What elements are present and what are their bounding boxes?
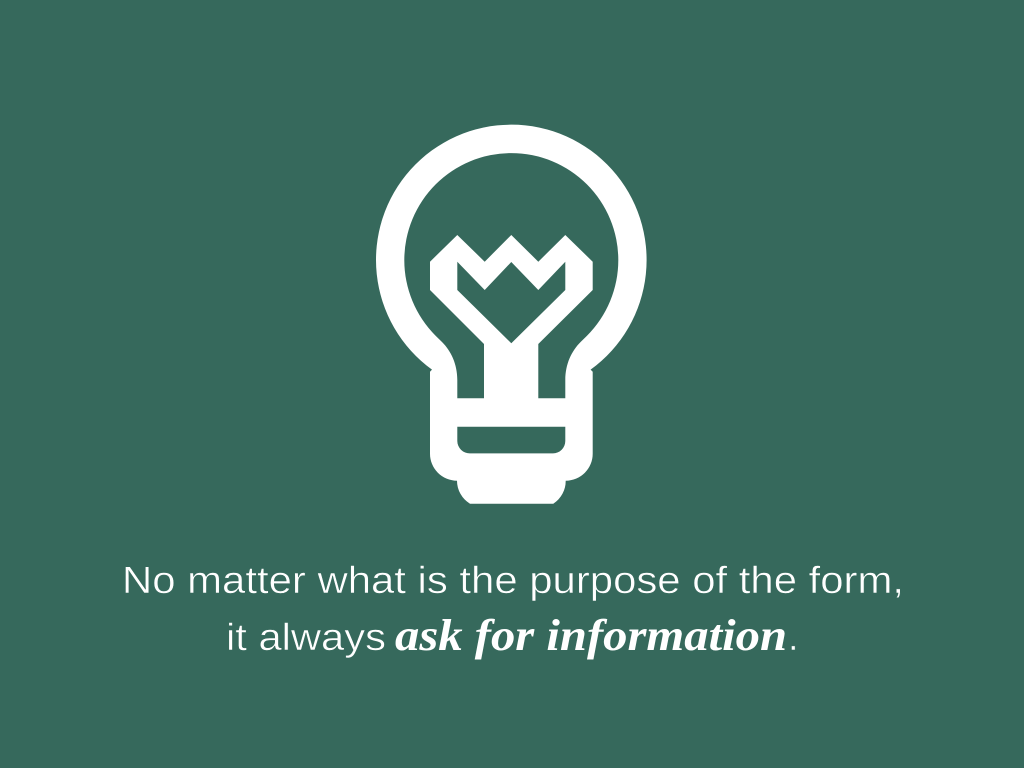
- emphasized script words: ask for information: [395, 611, 787, 660]
- period: .: [788, 617, 799, 659]
- text line 1: No matter what is the purpose of the form,: [122, 560, 904, 602]
- icon: light bulb: [376, 125, 647, 504]
- filament and stem: [430, 235, 593, 400]
- plain words: it always: [226, 617, 386, 659]
- text line 2: [226, 611, 799, 660]
- bulb glass and base outline: [376, 125, 647, 504]
